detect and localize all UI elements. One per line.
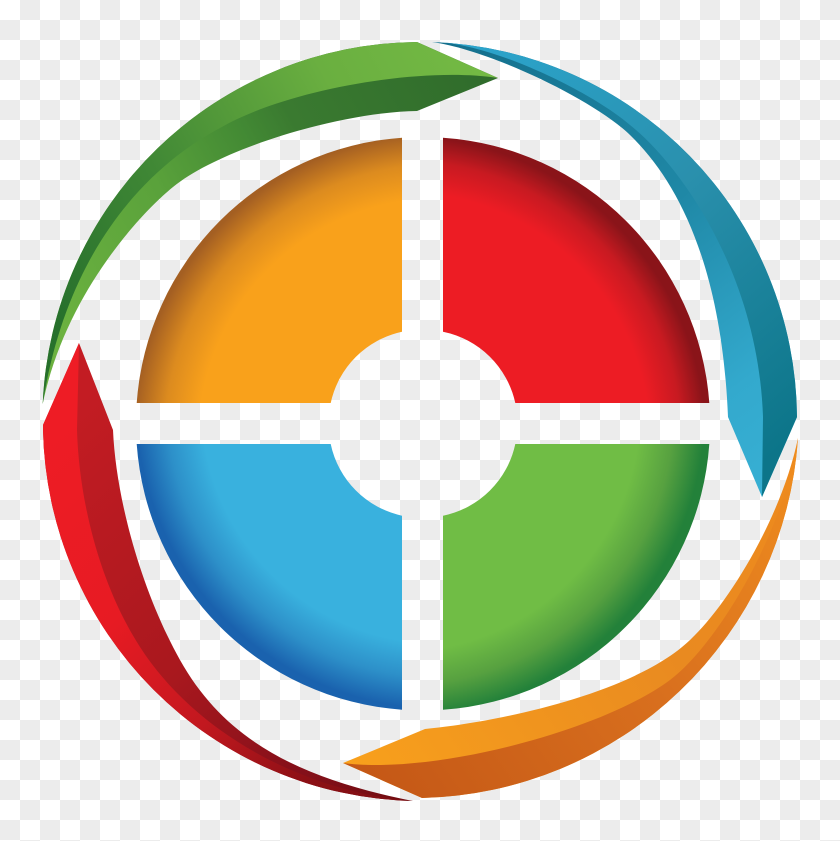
quadrant: orange, top-left bbox=[137, 138, 402, 403]
quadrant: red, top-right bbox=[443, 138, 709, 403]
arrow: blue, top-right bbox=[432, 42, 797, 497]
arrow: green, top-left bbox=[43, 42, 498, 404]
quadrant: blue, bottom-left bbox=[137, 444, 402, 710]
arrow: red, bottom-left bbox=[43, 343, 413, 801]
quadrant: green, bottom-right bbox=[443, 444, 709, 710]
arrow: orange, bottom-right bbox=[343, 438, 798, 798]
